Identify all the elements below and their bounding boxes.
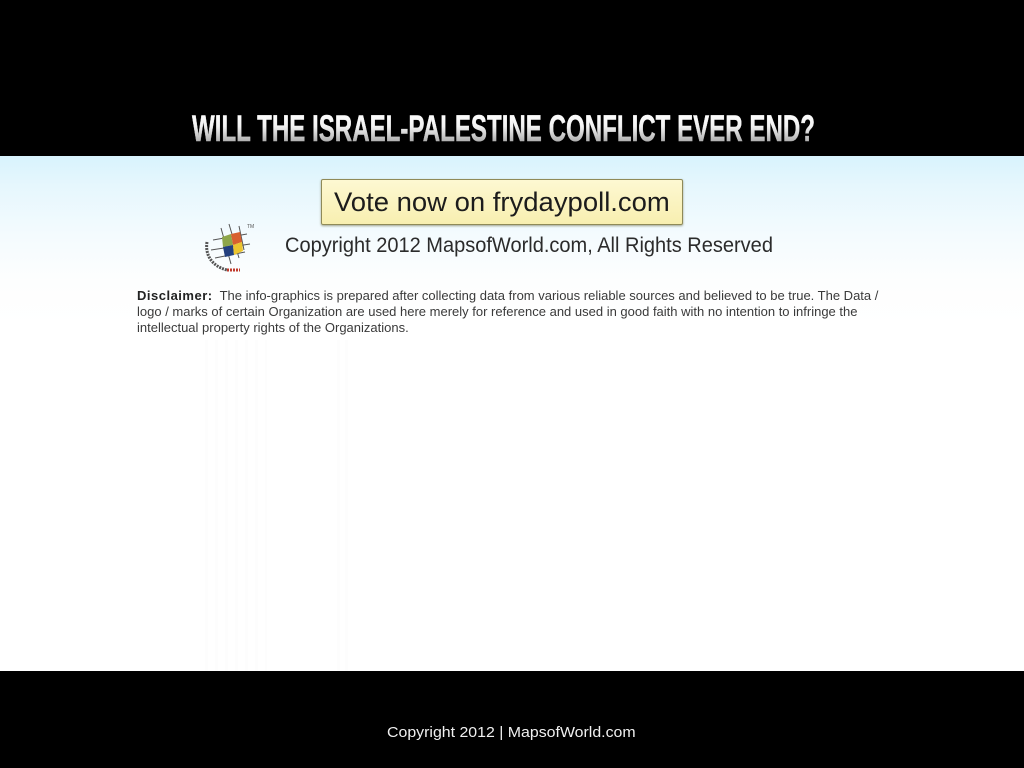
copyright line: Copyright 2012 MapsofWorld.com, All Rights Reserved — [285, 234, 773, 257]
disclaimer text block: logo / marks of certain Organization are used here merely for reference and used in good faith with no intention to infringe the — [137, 304, 857, 319]
callout: vote now button — [321, 179, 683, 225]
panel: sky gradient background — [0, 156, 1024, 671]
footer copyright: Copyright 2012 | MapsofWorld.com — [387, 724, 636, 741]
faint watermark pattern left column — [205, 340, 267, 671]
disclaimer text block — [137, 288, 878, 335]
faint watermark pattern right column — [337, 340, 353, 671]
icon: MapsofWorld logo: TM — [247, 224, 254, 230]
disclaimer text block: Disclaimer: The info-graphics is prepared after collecting data from various reliable sources and believed to be true. The Data / — [137, 288, 878, 303]
icon: MapsofWorld logo — [205, 224, 254, 272]
disclaimer text block: intellectual property rights of the Organizations. — [137, 320, 409, 335]
callout: vote now button: Vote now on frydaypoll.com — [334, 187, 670, 217]
